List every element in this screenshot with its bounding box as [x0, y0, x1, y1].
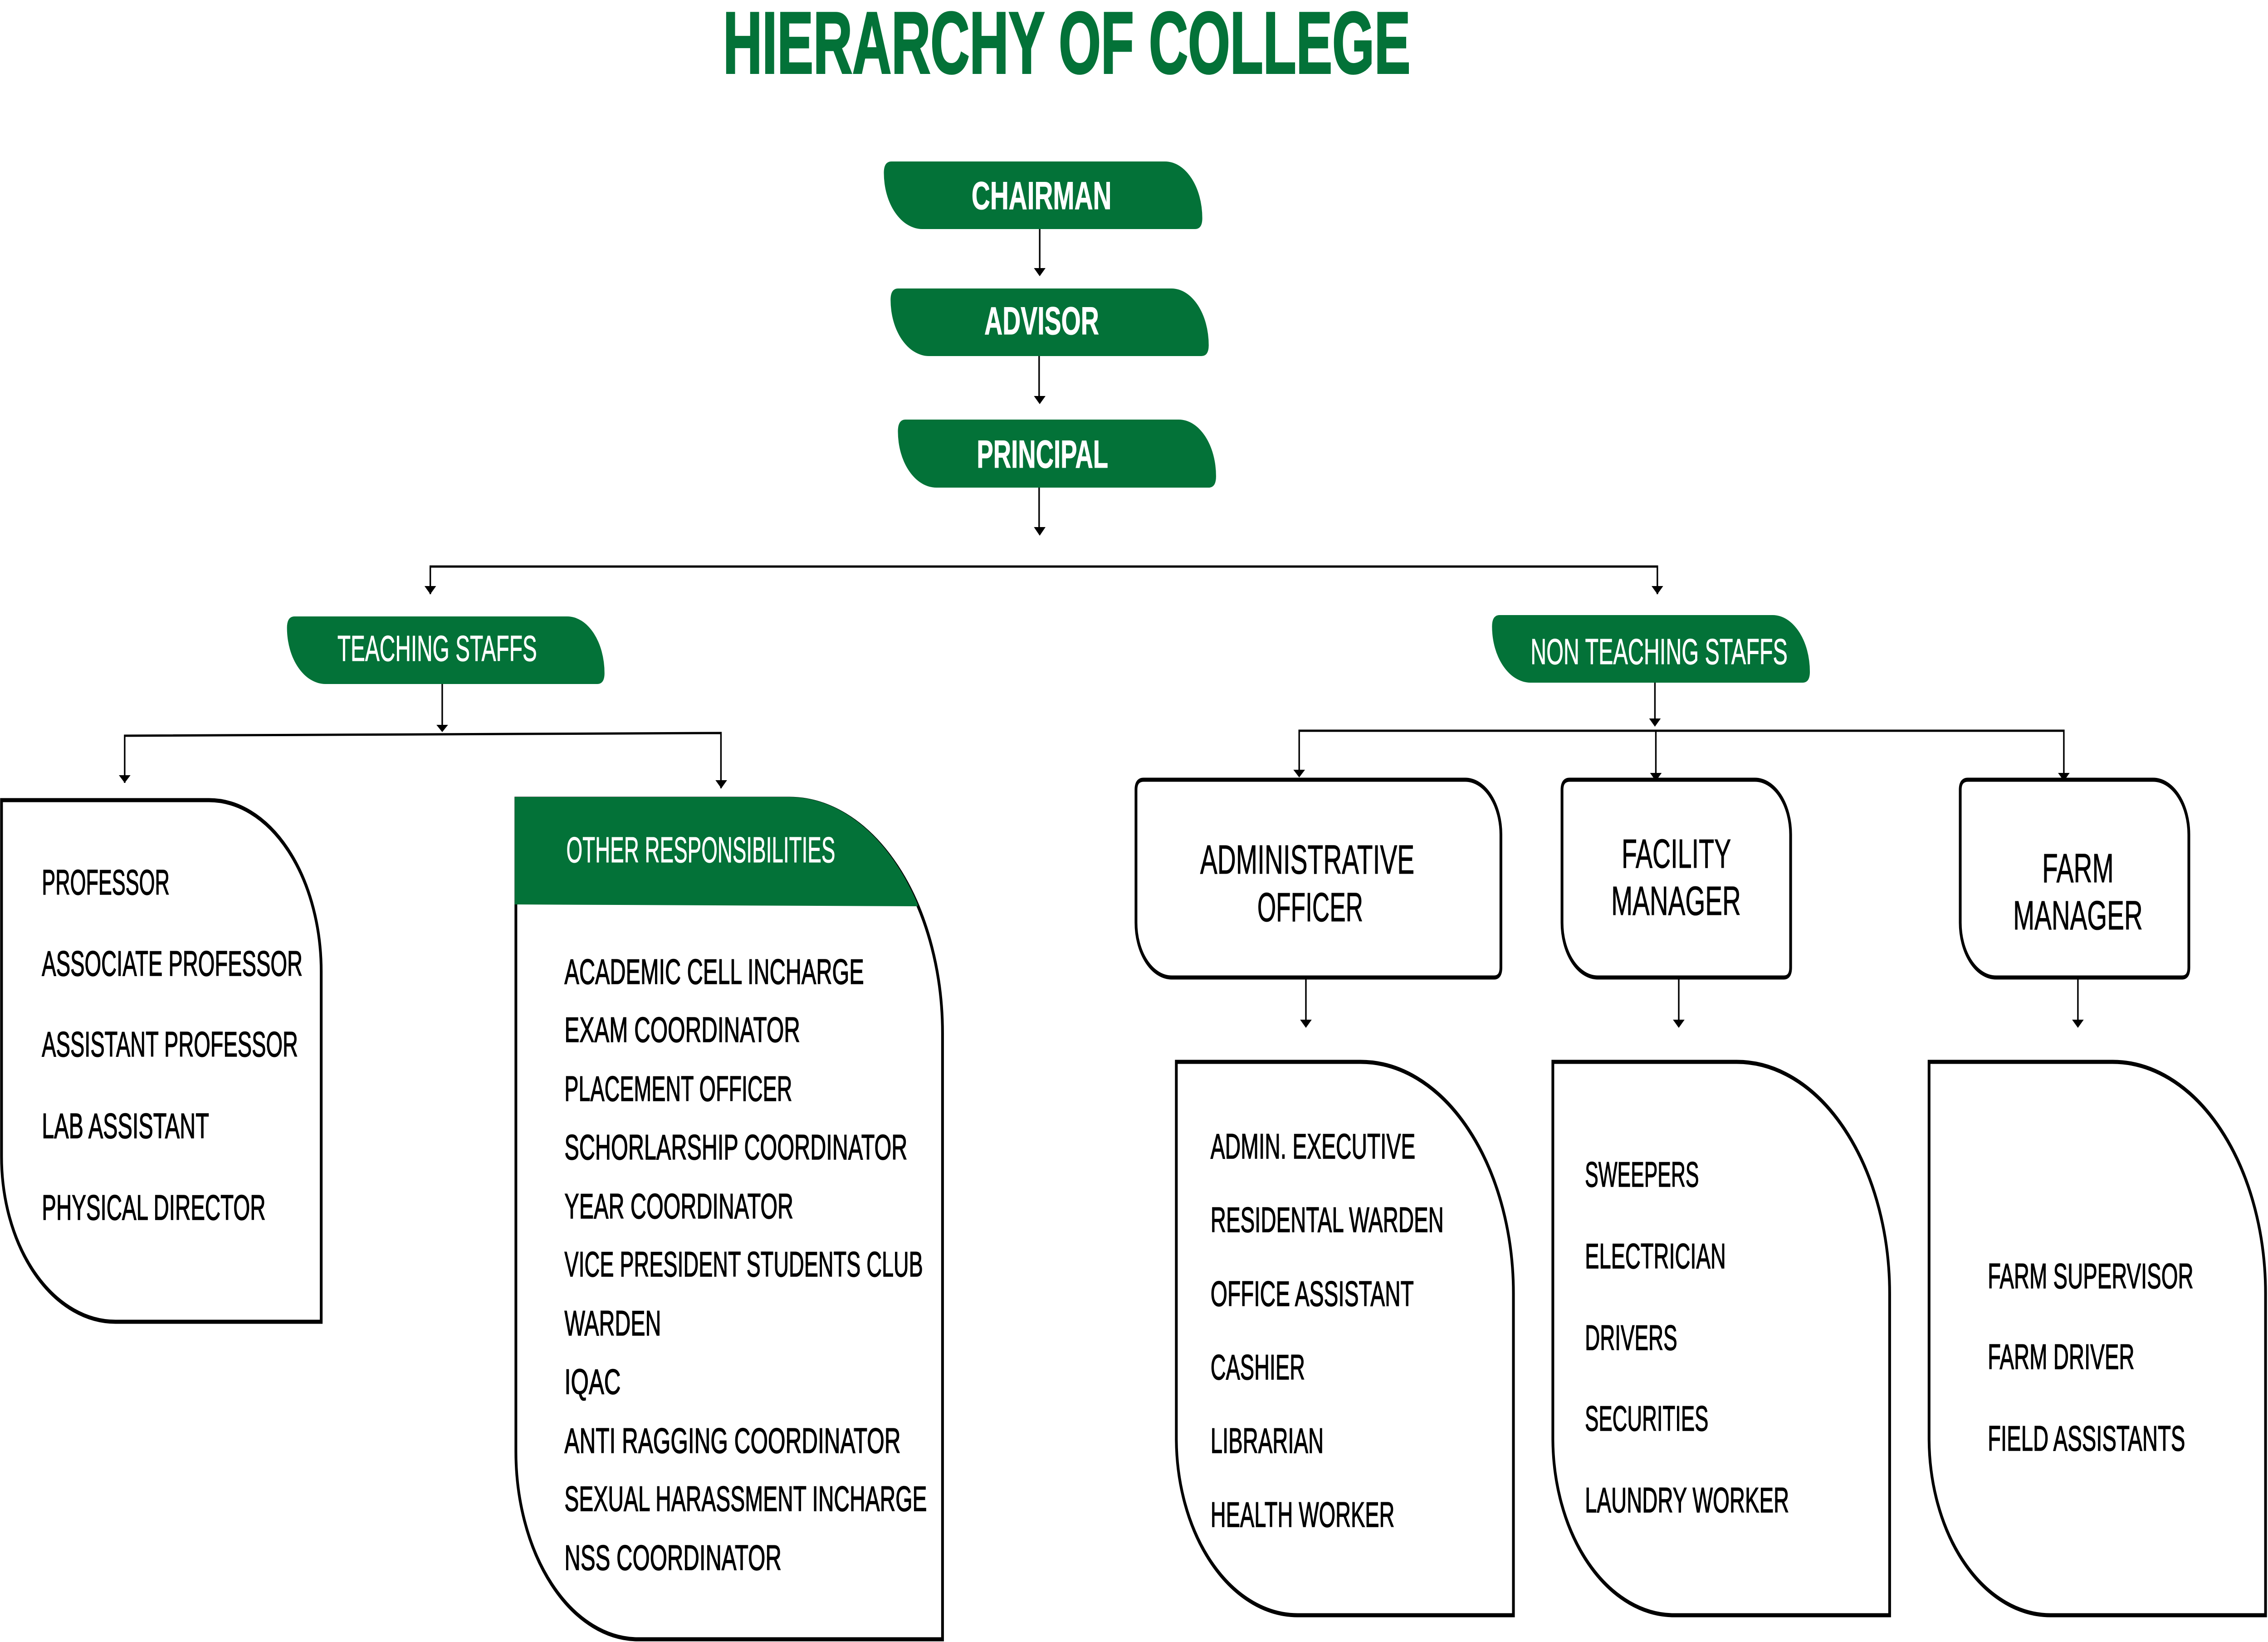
administrative staff list: HEALTH WORKER — [1211, 1495, 1394, 1535]
arrowheads: into facility and farm manager — [1650, 773, 2070, 781]
node: farm manager — [1960, 780, 2189, 977]
panel header: other responsibilities: OTHER RESPONSIBILITIES — [566, 830, 835, 870]
panel: other responsibilities — [515, 797, 943, 1639]
node: principal: PRINCIPAL — [977, 433, 1108, 476]
other responsibilities list: SCHORLARSHIP COORDINATOR — [564, 1128, 907, 1168]
farm staff list — [1988, 1257, 2194, 1459]
node: non teaching staffs — [1492, 615, 1810, 683]
administrative staff list: ADMIN. EXECUTIVE — [1211, 1127, 1415, 1167]
arrow: facility manager down — [1673, 977, 1685, 1028]
facility staff list: ELECTRICIAN — [1585, 1237, 1726, 1276]
other responsibilities list: ANTI RAGGING COORDINATOR — [564, 1422, 901, 1461]
arrow: farm manager down — [2072, 977, 2084, 1028]
node: advisor — [890, 288, 1209, 356]
arrow: administrative officer down — [1300, 977, 1312, 1028]
other responsibilities list: NSS COORDINATOR — [564, 1539, 782, 1578]
other responsibilities list: IQAC — [564, 1363, 621, 1402]
teaching roles list: ASSISTANT PROFESSOR — [42, 1025, 298, 1065]
node: advisor: ADVISOR — [984, 299, 1099, 343]
arrow: chairman to advisor — [1034, 229, 1046, 276]
facility staff list: SWEEPERS — [1585, 1155, 1699, 1195]
teaching roles list: ASSOCIATE PROFESSOR — [42, 944, 303, 984]
node: chairman: CHAIRMAN — [972, 174, 1111, 218]
facility staff list: LAUNDRY WORKER — [1585, 1481, 1789, 1520]
farm staff list: FARM DRIVER — [1988, 1338, 2135, 1377]
panel: administrative staff — [1176, 1062, 1513, 1615]
other responsibilities list: VICE PRESIDENT STUDENTS CLUB — [564, 1245, 923, 1285]
facility staff list: SECURITIES — [1585, 1399, 1708, 1439]
farm staff list: FIELD ASSISTANTS — [1988, 1419, 2185, 1459]
teaching roles list — [42, 863, 303, 1228]
administrative staff list: LIBRARIAN — [1211, 1422, 1324, 1461]
node: facility manager — [1562, 780, 1791, 977]
node: administrative officer: OFFICER — [1257, 885, 1363, 930]
panel: teaching roles — [1, 800, 321, 1322]
other responsibilities list: PLACEMENT OFFICER — [564, 1070, 792, 1109]
panel header: other responsibilities — [515, 797, 918, 906]
administrative staff list: OFFICE ASSISTANT — [1211, 1275, 1414, 1314]
other responsibilities list: EXAM COORDINATOR — [564, 1011, 800, 1050]
node: facility manager: MANAGER — [1611, 879, 1741, 924]
node: teaching staffs: TEACHING STAFFS — [337, 628, 537, 669]
teaching roles list: PROFESSOR — [42, 863, 170, 903]
node: facility manager: FACILITY — [1622, 831, 1731, 877]
administrative staff list: CASHIER — [1211, 1348, 1305, 1388]
panel: facility staff — [1553, 1062, 1890, 1615]
other responsibilities list: YEAR COORDINATOR — [564, 1187, 793, 1227]
other responsibilities list: ACADEMIC CELL INCHARGE — [564, 953, 864, 992]
other responsibilities list: WARDEN — [564, 1304, 661, 1344]
teaching roles list: PHYSICAL DIRECTOR — [42, 1188, 266, 1228]
facility staff list — [1585, 1155, 1789, 1520]
connector: non teaching staffs to officers — [1293, 683, 2064, 777]
node: farm manager: MANAGER — [2013, 893, 2143, 938]
connector: principal to staff branches — [425, 567, 1663, 594]
node: administrative officer: ADMINISTRATIVE — [1200, 837, 1414, 883]
panel: farm staff — [1929, 1062, 2266, 1615]
node: chairman — [884, 161, 1202, 229]
arrow: advisor to principal — [1034, 356, 1046, 404]
farm staff list: FARM SUPERVISOR — [1988, 1257, 2194, 1296]
node: principal — [898, 420, 1216, 488]
facility staff list: DRIVERS — [1585, 1319, 1677, 1358]
node: administrative officer — [1136, 780, 1501, 977]
other responsibilities list: SEXUAL HARASSMENT INCHARGE — [564, 1480, 927, 1519]
node: farm manager: FARM — [2042, 846, 2114, 891]
other responsibilities list — [564, 953, 927, 1578]
administrative staff list — [1211, 1127, 1444, 1535]
node: teaching staffs — [287, 616, 605, 684]
administrative staff list: RESIDENTAL WARDEN — [1211, 1201, 1444, 1240]
arrow: principal down — [1034, 488, 1046, 536]
node: non teaching staffs: NON TEACHING STAFFS — [1530, 631, 1788, 672]
connector: teaching staffs to branches — [119, 684, 727, 788]
teaching roles list: LAB ASSISTANT — [42, 1107, 209, 1146]
